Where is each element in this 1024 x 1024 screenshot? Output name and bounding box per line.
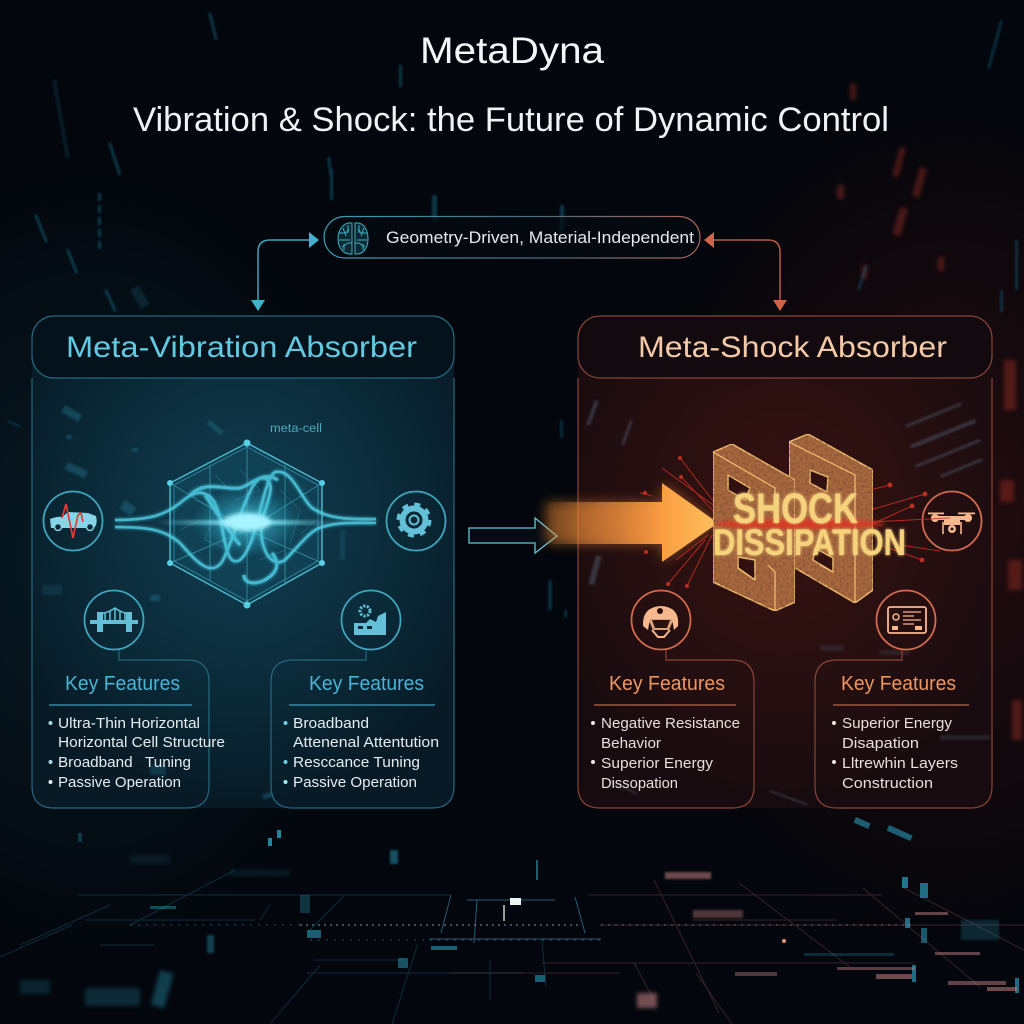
meta-cell label: meta-cell [270,423,322,435]
icon: bridge [84,590,144,650]
card: key features 3 [591,673,740,792]
meta-cell hexagon with waves [115,440,376,608]
icon: helmet [632,590,690,650]
card: key features 2: Passive Operation [293,774,417,791]
icon: vehicle vibration [44,492,102,550]
connector lines [119,650,366,660]
header [578,316,992,378]
card: key features 1: Ultra-Thin Horizontal [58,715,200,732]
panel streaks [42,405,345,800]
card: key features 4: Key Features [841,673,956,695]
header [32,316,454,378]
icon: brain [338,223,368,254]
icon: shock block [640,434,950,611]
title: MetaDyna [420,30,604,71]
card: key features 3: Negative Resistance [601,715,740,732]
card: key features 1: Passive Operation [58,774,181,791]
label: shock dissipation [713,485,906,563]
card: key features 4: Lltrewhin Layers [842,755,958,772]
panel: meta-shock absorber [578,316,992,808]
block: right piece [789,434,873,603]
label: Geometry-Driven, Material-Independent [386,228,694,247]
header: Meta-Shock Absorber [638,331,947,364]
label: shock dissipation: DISSIPATION [713,522,906,563]
panel: meta-vibration absorber [32,316,454,808]
label: shock dissipation: SHOCK [733,485,858,533]
card: key features 2: Broadband [293,715,369,732]
icon: factory [342,590,400,650]
card: key features 4: Disapation [842,735,919,752]
subtitle: Vibration & Shock: the Future of Dynamic Control [133,101,889,139]
banner: geometry-driven pill [324,216,700,258]
connector lines [666,650,902,660]
card: key features 4 [832,673,969,792]
card: key features 1: Key Features [65,673,180,695]
icon: id card [876,590,936,650]
block: left piece [713,444,795,611]
panel streaks [586,400,990,806]
card: key features 2: Resccance Tuning [293,754,420,771]
header: Meta-Vibration Absorber [66,331,417,364]
block: inner edges [713,442,855,611]
card: key features 2: Attenenal Attentution [293,734,439,751]
icon: drone [922,492,982,550]
card: key features 3: Key Features [609,673,725,695]
card: key features 2: Key Features [309,673,424,695]
card: key features 2 [284,673,439,791]
card: key features 3: Dissopation [601,775,678,792]
card: key features 1: Broadband Tuning [58,754,191,771]
arrow: orange shock arrow [545,483,718,562]
arrow: outlined transition arrow [469,518,557,553]
card: key features 1 [48,673,225,791]
arrow: pill to shock panel [704,232,787,311]
arrow: pill to vibration panel [251,232,319,311]
card: key features 1: Horizontal Cell Structure [58,734,225,751]
card: key features 3: Behavior [601,735,661,752]
card: key features 3: Superior Energy [601,755,714,772]
impact sparks [640,456,950,588]
background: circuit floor [0,817,1024,1024]
icon: gear [386,492,446,550]
card: key features 4: Construction [842,775,933,792]
card: key features 4: Superior Energy [842,715,952,732]
